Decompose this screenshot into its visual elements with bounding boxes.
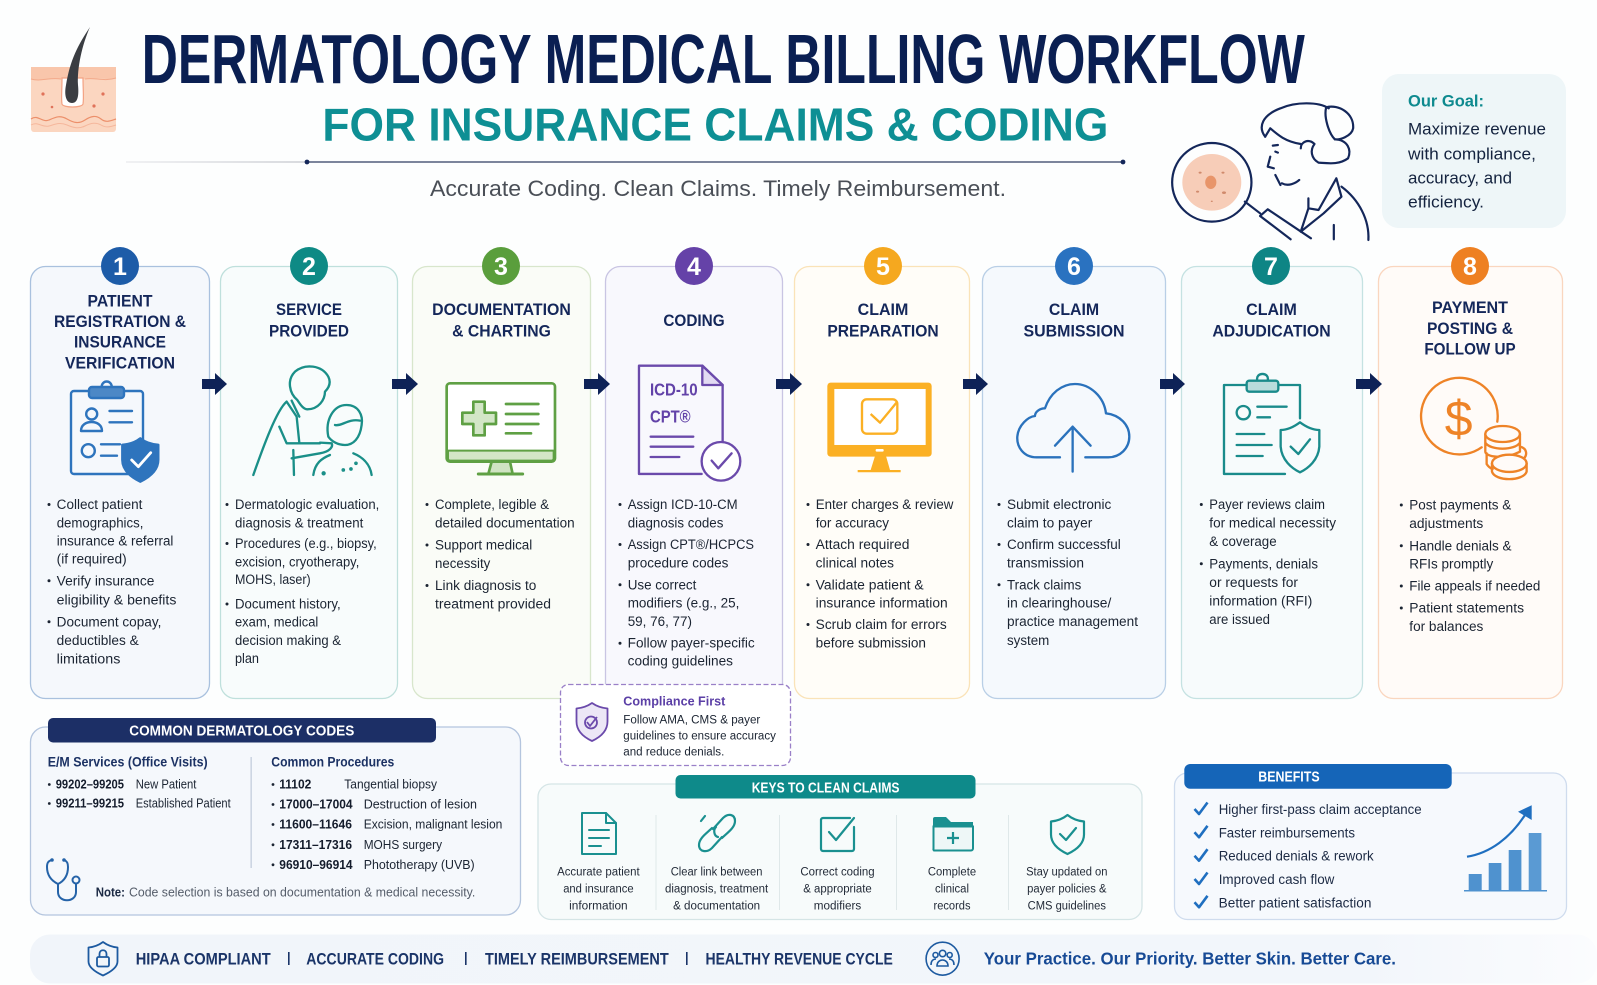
icon: code document with check: CPT® (650, 407, 691, 427)
bullet list (226, 497, 379, 666)
step title: PROVIDED (269, 321, 349, 340)
panel: keys to clean claims (538, 775, 1142, 920)
step badge 6: 6 (1067, 253, 1081, 281)
bullet list: Collect patient (57, 497, 143, 512)
bullet list: in clearinghouse/ (1007, 596, 1112, 611)
step badge 7 (1252, 247, 1290, 285)
bullet list: information (RFI) (1209, 593, 1312, 608)
bullet list: detailed documentation (435, 515, 575, 530)
bullet list: Post payments & (1409, 498, 1511, 513)
bullet list: or requests for (1209, 575, 1299, 590)
common procedures column (271, 755, 502, 872)
bullet list: are issued (1209, 612, 1270, 627)
common procedures column: 11600–11646 (279, 818, 352, 832)
arrow 5 to 6 (963, 373, 988, 395)
common procedures column: Common Procedures (271, 755, 394, 770)
icon: code document with check (639, 366, 740, 481)
arrow 2 to 3 (392, 373, 418, 395)
common procedures column: Phototherapy (UVB) (364, 858, 475, 872)
step badge 7: 7 (1264, 253, 1278, 281)
bullet list: Handle denials & (1409, 538, 1512, 553)
bullet list: adjustments (1409, 516, 1484, 531)
bullet list: File appeals if needed (1409, 579, 1540, 594)
footer values: HIPAA COMPLIANT (136, 950, 271, 968)
icon: skin cross-section with hair follicle (31, 27, 116, 132)
icon: cloud upload (1017, 384, 1129, 472)
benefits list: Faster reimbursements (1219, 825, 1355, 840)
step title: REGISTRATION & (54, 312, 186, 331)
key 2: clear link: & documentation (673, 900, 760, 912)
chart: growth bars with arrow (1464, 805, 1547, 892)
step title (1212, 300, 1331, 340)
common procedures column: Excision, malignant lesion (364, 818, 502, 832)
keys header: KEYS TO CLEAN CLAIMS (752, 780, 900, 796)
step title: PREPARATION (827, 321, 939, 340)
step title: SERVICE (276, 300, 342, 319)
step title: VERIFICATION (65, 353, 175, 372)
bullet list: excision, cryotherapy, (235, 554, 359, 569)
step title: CLAIM (858, 300, 908, 319)
bullet list: Validate patient & (816, 577, 924, 592)
arrow 3 to 4 (584, 373, 610, 395)
E/M services column: 99202–99205 (56, 778, 124, 792)
goal heading: Our Goal: (1408, 92, 1484, 111)
step title: DOCUMENTATION (432, 300, 571, 319)
step badge 4 (675, 247, 713, 285)
step badge 8 (1451, 247, 1489, 285)
callout text (623, 714, 776, 758)
step badge 1: 1 (113, 253, 127, 281)
arrow 6 to 7 (1160, 373, 1185, 395)
bullet list: eligibility & benefits (57, 592, 177, 607)
divider rule (126, 160, 1125, 164)
step badge 6 (1055, 247, 1093, 285)
benefits list (1219, 802, 1422, 910)
footer values: ACCURATE CODING (306, 950, 444, 968)
bullet list: Enter charges & review (816, 497, 954, 512)
bullet list: necessity (435, 556, 491, 571)
arrow 4 to 5 (776, 373, 802, 395)
benefits header: BENEFITS (1258, 769, 1320, 785)
bullet list: diagnosis codes (628, 515, 724, 530)
step title (54, 291, 186, 372)
arrow 7 to 8 (1356, 373, 1382, 395)
key 5: stay updated: Stay updated on (1026, 867, 1108, 879)
step badge 3 (482, 247, 520, 285)
icon: compliance shield (576, 703, 608, 741)
bullet list (998, 497, 1138, 648)
footer values (136, 950, 893, 968)
bullet list: Use correct (628, 577, 697, 592)
common procedures column: 96910–96914 (279, 858, 353, 872)
step title (269, 300, 349, 340)
step title (827, 300, 939, 340)
bullet list: procedure codes (628, 555, 729, 570)
subtitle: FOR INSURANCE CLAIMS & CODING (322, 98, 1108, 150)
benefits list: Improved cash flow (1219, 872, 1335, 887)
bullet list: system (1007, 633, 1049, 648)
icon: dollar coin and stack: $ (1445, 390, 1473, 446)
key 3: correct coding: modifiers (814, 900, 861, 912)
icon: monitor with medical cross (447, 383, 555, 474)
bullet list: Dermatologic evaluation, (235, 497, 379, 512)
tagline: Accurate Coding. Clean Claims. Timely Reimbursement. (430, 176, 1006, 201)
footer band (30, 934, 1597, 984)
key 4: complete records: Complete (928, 867, 976, 879)
footer slogan: Your Practice. Our Priority. Better Skin. Better Care. (984, 948, 1396, 968)
common procedures column: Destruction of lesion (364, 798, 477, 812)
bullet list: Submit electronic (1007, 497, 1112, 512)
step title: ADJUDICATION (1212, 321, 1331, 340)
key 2: clear link: Clear link between (671, 867, 762, 879)
key 1: accurate information: information (569, 900, 628, 912)
bullet list (806, 497, 954, 650)
step title: INSURANCE (74, 333, 166, 352)
key 3: correct coding: Correct coding (800, 867, 875, 879)
key 3: correct coding: & appropriate (803, 883, 872, 895)
step title: POSTING & (1427, 319, 1513, 338)
codes header: COMMON DERMATOLOGY CODES (129, 724, 355, 740)
step title: CLAIM (1049, 300, 1099, 319)
bullet list (618, 497, 755, 669)
icon: stethoscope (47, 859, 80, 900)
bullet list: diagnosis & treatment (235, 515, 364, 530)
bullet list: Track claims (1007, 577, 1082, 592)
panel: our goal (1382, 74, 1566, 228)
icon: care team circle (926, 942, 959, 975)
goal text: Maximize revenue (1408, 119, 1546, 138)
key 5: stay updated: CMS guidelines (1028, 900, 1106, 912)
panel: step 2 service provided (220, 247, 398, 698)
bullet list: clinical notes (816, 555, 894, 570)
step title (1024, 300, 1124, 340)
callout text: Follow AMA, CMS & payer (623, 714, 760, 726)
bullet list: Follow payer-specific (628, 636, 755, 651)
bullet list: Verify insurance (57, 574, 154, 589)
callout text: guidelines to ensure accuracy (623, 730, 776, 742)
bullet list: transmission (1007, 555, 1084, 570)
bullet list: plan (235, 651, 259, 666)
goal text: efficiency. (1408, 193, 1484, 212)
footer values: HEALTHY REVENUE CYCLE (706, 950, 893, 968)
E/M services column: Established Patient (136, 797, 231, 811)
bullet list: deductibles & (57, 633, 139, 648)
icon: monitor with checkbox (827, 383, 932, 472)
arrow 1 to 2 (202, 373, 227, 395)
key 5: stay updated: payer policies & (1027, 883, 1107, 895)
callout: compliance first (560, 684, 790, 766)
panel: common dermatology codes (30, 718, 520, 915)
common procedures column: 11102 (279, 778, 311, 792)
step badge 8: 8 (1463, 253, 1477, 281)
step title (1424, 298, 1516, 359)
icon: doctor examining patient (253, 366, 372, 475)
goal text: accuracy, and (1408, 168, 1512, 187)
key 2: clear link (665, 815, 769, 912)
bullet list: for balances (1409, 619, 1484, 634)
goal text (1407, 119, 1546, 212)
note: Note: (96, 886, 125, 900)
step badge 4: 4 (687, 253, 701, 281)
panel: step 7 claim adjudication (1182, 247, 1362, 698)
bullet list: insurance information (816, 596, 948, 611)
bullet list: MOHS, laser) (235, 572, 311, 587)
step badge 5 (864, 247, 902, 285)
E/M services column: 99211–99215 (56, 797, 124, 811)
bullet list: decision making & (235, 633, 341, 648)
icon: code document with check: ICD-10 (650, 380, 698, 400)
common procedures column: Tangential biopsy (344, 778, 438, 792)
bullet list: treatment provided (435, 596, 551, 611)
bullet list: Assign CPT®/HCPCS (628, 537, 754, 552)
step title: FOLLOW UP (1424, 340, 1516, 359)
E/M services column: E/M Services (Office Visits) (48, 755, 208, 770)
key 3: correct coding (800, 818, 875, 912)
codes header (48, 718, 436, 742)
bullet list: for medical necessity (1209, 515, 1336, 530)
bullet list: 59, 76, 77) (628, 614, 692, 629)
benefits list: Higher first-pass claim acceptance (1219, 802, 1422, 817)
benefits list: Reduced denials & rework (1219, 849, 1374, 864)
bullet list: modifiers (e.g., 25, (628, 596, 739, 611)
bullet list: Patient statements (1409, 601, 1524, 616)
bullet list: Payer reviews claim (1209, 497, 1325, 512)
bullet list: demographics, (57, 515, 143, 530)
key 1: accurate information: Accurate patient (557, 867, 640, 879)
key 2: clear link: diagnosis, treatment (665, 883, 769, 895)
bullet list: insurance & referral (57, 534, 173, 549)
step title: PATIENT (88, 291, 153, 310)
bullet list: coding guidelines (628, 654, 733, 669)
step badge 1 (101, 247, 139, 285)
bullet list: Link diagnosis to (435, 578, 536, 593)
step badge 5: 5 (876, 253, 890, 281)
step title: CODING (663, 311, 725, 330)
key 4: complete records: records (934, 900, 971, 912)
key 4: complete records: clinical (935, 883, 969, 895)
bullet list: for accuracy (816, 515, 889, 530)
common procedures column: 17000–17004 (279, 798, 353, 812)
step title (432, 300, 571, 340)
bullet list: exam, medical (235, 615, 318, 630)
callout text: and reduce denials. (623, 746, 724, 758)
panel: step 6 claim submission (982, 247, 1166, 698)
step title: PAYMENT (1432, 298, 1509, 317)
goal text: with compliance, (1407, 144, 1536, 163)
icon: clipboard with shield (71, 382, 158, 482)
footer values: TIMELY REIMBURSEMENT (485, 950, 669, 968)
panel: step 3 documentation (412, 247, 590, 698)
panel: step 5 claim preparation (794, 247, 970, 698)
bullet list: claim to payer (1007, 515, 1093, 530)
key 1: accurate information (557, 813, 640, 912)
step title: CLAIM (1246, 300, 1297, 319)
E/M services column: New Patient (136, 778, 197, 792)
key 5: stay updated (1026, 815, 1108, 912)
bullet list: RFIs promptly (1409, 557, 1494, 572)
illustration: dermatologist with magnifying glass (1172, 103, 1368, 240)
step badge 2: 2 (302, 253, 316, 281)
bullet list: & coverage (1209, 534, 1277, 549)
bullet list: before submission (816, 635, 926, 650)
common procedures column: 17311–17316 (279, 838, 352, 852)
bullet list: (if required) (57, 552, 127, 567)
key 4: complete records (928, 817, 976, 912)
step title: & CHARTING (452, 321, 551, 340)
bullet list: Document history, (235, 597, 341, 612)
bullet list: Complete, legible & (435, 497, 549, 512)
bullet list: limitations (57, 651, 121, 666)
bullet list: Procedures (e.g., biopsy, (235, 536, 377, 551)
panel: step 4 coding (606, 247, 782, 698)
step title: SUBMISSION (1024, 321, 1124, 340)
bullet list (1400, 498, 1540, 634)
step badge 3: 3 (494, 253, 508, 281)
key 1: accurate information: and insurance (563, 883, 634, 895)
bullet list: Scrub claim for errors (816, 617, 947, 632)
benefits list: Better patient satisfaction (1219, 895, 1371, 910)
keys header (676, 775, 976, 798)
icon: dollar coin and stack (1421, 378, 1527, 479)
icon: shield with lock (88, 942, 118, 976)
bullet list: Confirm successful (1007, 537, 1121, 552)
bullet list (426, 497, 575, 611)
bullet list: Assign ICD-10-CM (628, 497, 738, 512)
bullet list (1200, 497, 1336, 627)
bullet list: Document copay, (57, 615, 161, 630)
bullet list: practice management (1007, 614, 1138, 629)
bullet list: Payments, denials (1209, 556, 1318, 571)
panel: step 8 payment posting (1378, 247, 1562, 698)
E/M services column (48, 755, 231, 811)
callout heading: Compliance First (623, 694, 726, 709)
icon: clipboard with shield check (1224, 374, 1319, 474)
bullet list (48, 497, 177, 666)
panel: benefits (1174, 764, 1566, 920)
bullet list: Support medical (435, 538, 532, 553)
common procedures column: MOHS surgery (364, 838, 443, 852)
step badge 2 (290, 247, 328, 285)
benefits header (1184, 764, 1452, 789)
panel: step 1 patient registration (30, 247, 210, 698)
note: Code selection is based on documentation & medical necessity. (129, 886, 475, 900)
bullet list: Attach required (816, 537, 909, 552)
benefit checks (1194, 802, 1208, 907)
